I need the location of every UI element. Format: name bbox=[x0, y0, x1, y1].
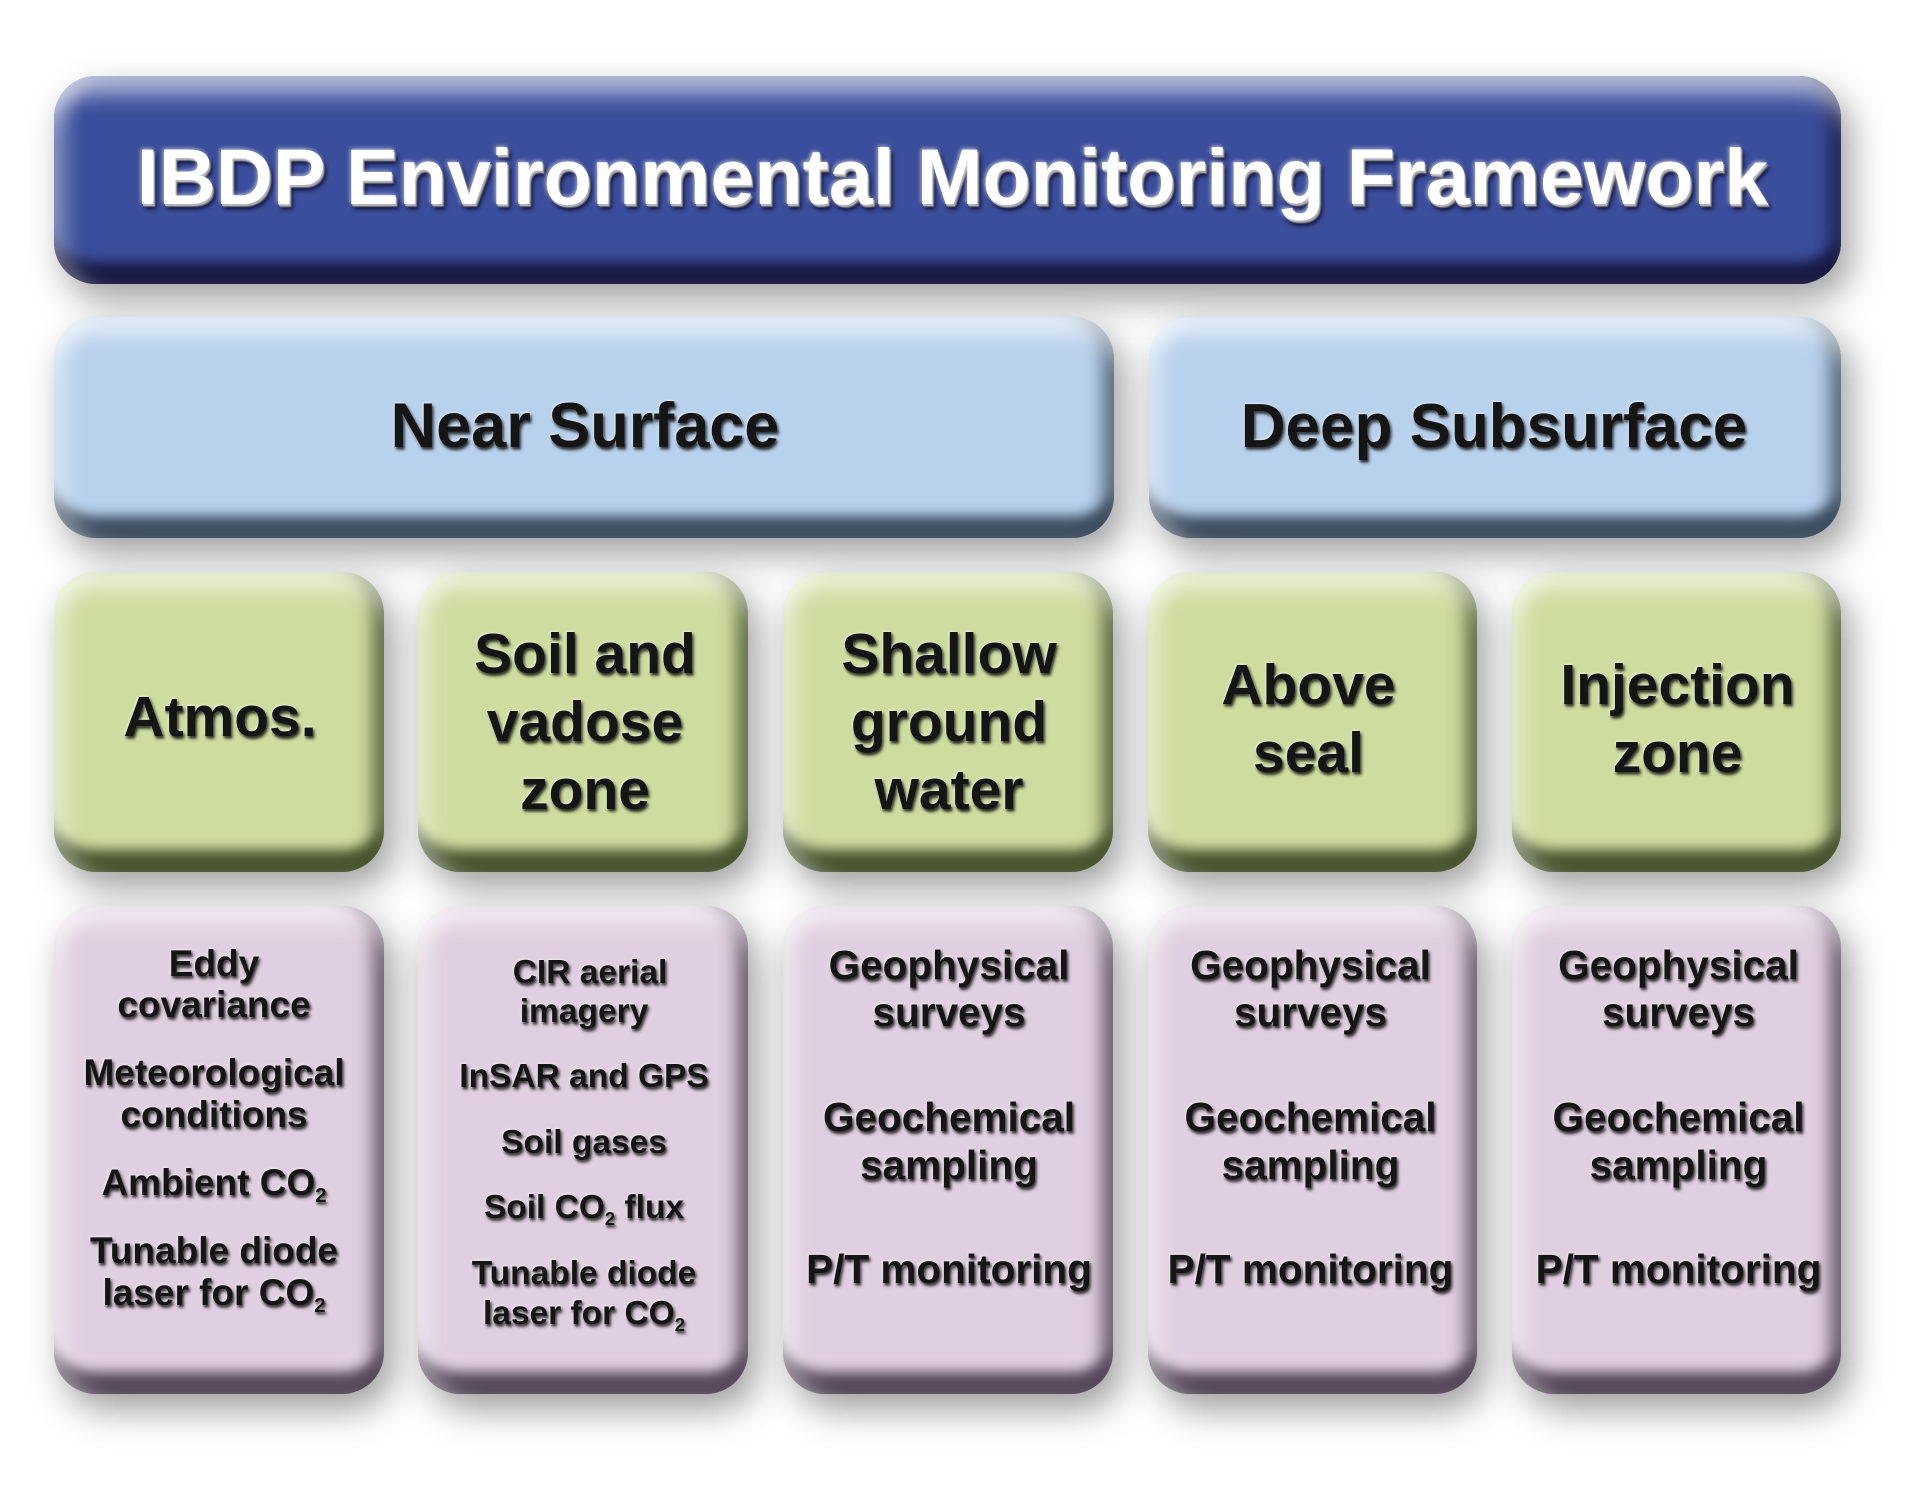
panel: injection zone methods bbox=[1512, 906, 1841, 1394]
panel: injection zone methods: Geochemical bbox=[1552, 1094, 1805, 1140]
panel: injection zone methods: P/T monitoring bbox=[1536, 1246, 1821, 1292]
panel: shallow ground water methods: Geochemical bbox=[823, 1094, 1075, 1140]
panel: shallow ground water methods: P/T monitoring bbox=[806, 1246, 1092, 1292]
panel: shallow ground water category bbox=[783, 572, 1113, 872]
panel: shallow ground water methods: sampling bbox=[860, 1142, 1038, 1188]
panel: above seal methods: Geophysical bbox=[1190, 942, 1431, 988]
panel: atmos methods: Meteorological bbox=[83, 1052, 345, 1093]
panel: above seal category bbox=[1148, 572, 1477, 872]
panel: atmos methods: laser for CO2 bbox=[102, 1272, 326, 1317]
panel: atmos methods: conditions bbox=[120, 1094, 308, 1135]
title banner bbox=[54, 76, 1841, 284]
panel: above seal methods: surveys bbox=[1234, 989, 1387, 1035]
panel: shallow ground water methods bbox=[783, 906, 1113, 1394]
panel: shallow ground water category: Shallow bbox=[841, 622, 1057, 686]
panel: soil and vadose zone category: vadose bbox=[487, 690, 683, 754]
panel: soil and vadose zone methods: Soil gases bbox=[501, 1124, 667, 1161]
panel: shallow ground water methods: Geophysical bbox=[829, 942, 1069, 988]
panel: atmos category bbox=[54, 572, 384, 872]
panel: soil and vadose zone methods: CIR aerial bbox=[513, 954, 667, 991]
panel: atmos methods: Ambient CO2 bbox=[101, 1162, 327, 1207]
panel: atmos methods: covariance bbox=[117, 984, 311, 1025]
panel: soil and vadose zone category: zone bbox=[520, 758, 650, 822]
panel: above seal methods: P/T monitoring bbox=[1168, 1246, 1453, 1292]
panel: soil and vadose zone category bbox=[418, 572, 748, 872]
panel: injection zone category: zone bbox=[1613, 721, 1742, 785]
panel: injection zone methods: surveys bbox=[1602, 989, 1755, 1035]
panel: soil and vadose zone methods: laser for CO2 bbox=[483, 1295, 685, 1335]
panel: soil and vadose zone methods: InSAR and GPS bbox=[459, 1058, 709, 1095]
panel: atmos methods: Tunable diode bbox=[90, 1230, 338, 1271]
panel: soil and vadose zone methods: Tunable diode bbox=[472, 1255, 696, 1292]
panel: injection zone methods: sampling bbox=[1590, 1142, 1767, 1188]
panel: injection zone methods: Geophysical bbox=[1558, 942, 1799, 988]
panel: above seal methods: sampling bbox=[1222, 1142, 1399, 1188]
panel: injection zone category bbox=[1512, 572, 1841, 872]
panel: near surface heading bbox=[54, 317, 1114, 538]
panel: atmos methods bbox=[54, 906, 384, 1394]
panel: shallow ground water methods: surveys bbox=[872, 989, 1026, 1035]
panel: above seal category: seal bbox=[1253, 721, 1364, 785]
title banner: IBDP Environmental Monitoring Framework bbox=[137, 132, 1768, 221]
panel: atmos category: Atmos. bbox=[123, 685, 317, 749]
panel: deep subsurface heading bbox=[1149, 317, 1841, 538]
panel: above seal category: Above bbox=[1221, 653, 1396, 717]
panel: above seal methods bbox=[1148, 906, 1477, 1394]
panel: soil and vadose zone methods: Soil CO2 flux bbox=[484, 1189, 684, 1229]
panel: deep subsurface heading: Deep Subsurface bbox=[1241, 392, 1747, 461]
panel: soil and vadose zone methods: imagery bbox=[520, 993, 648, 1030]
panel: shallow ground water category: water bbox=[875, 758, 1023, 822]
panel: shallow ground water category: ground bbox=[851, 690, 1047, 754]
panel: soil and vadose zone methods bbox=[418, 906, 748, 1394]
panel: above seal methods: Geochemical bbox=[1184, 1094, 1437, 1140]
panel: injection zone category: Injection bbox=[1560, 653, 1795, 717]
panel: atmos methods: Eddy bbox=[169, 943, 259, 984]
panel: soil and vadose zone category: Soil and bbox=[474, 622, 696, 686]
panel: near surface heading: Near Surface bbox=[391, 391, 779, 461]
